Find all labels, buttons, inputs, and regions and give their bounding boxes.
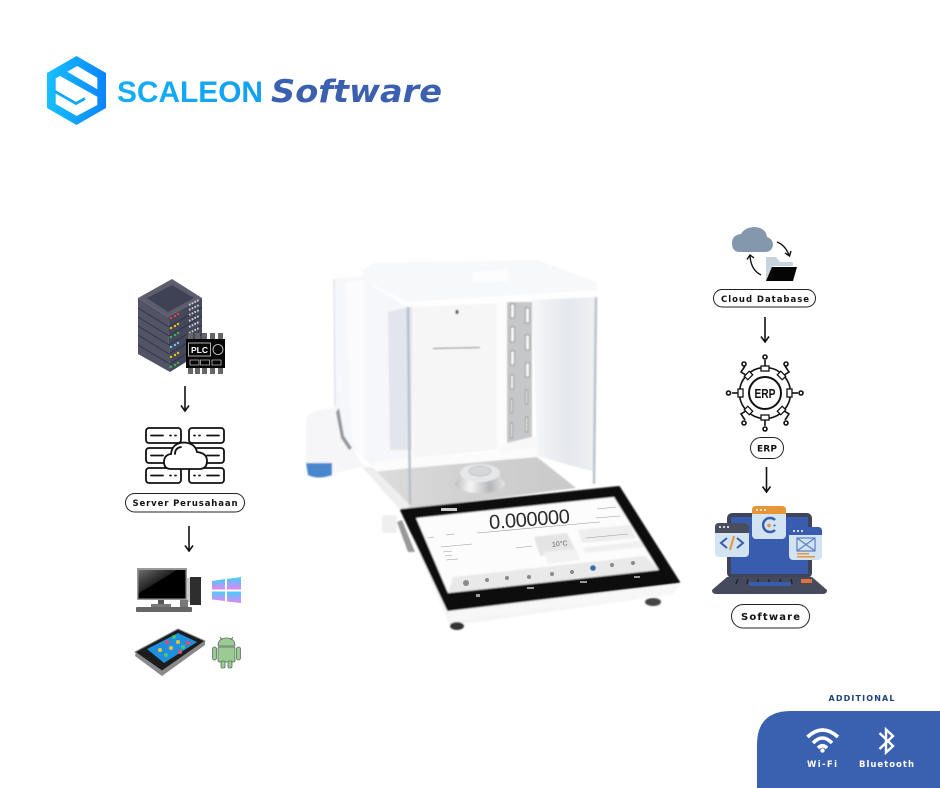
icon: Android logo [212, 637, 240, 668]
icon: ERP gear [726, 355, 803, 431]
label: Bluetooth: Bluetooth [859, 760, 914, 770]
icon: laptop with software windows [712, 506, 827, 594]
heading: Additional: ADDITIONAL [828, 694, 894, 703]
panel: additional connectivity [757, 711, 940, 788]
weighing pan [455, 464, 505, 493]
label: Software [732, 604, 810, 628]
arrow: company server to devices [185, 526, 193, 551]
icon: cloud and folder sync [732, 227, 797, 281]
steel floor [372, 457, 576, 510]
icon: server rack [138, 279, 202, 372]
display screen [416, 497, 659, 593]
base support bump [382, 515, 397, 533]
icon: PLC module: PLC [191, 345, 208, 355]
screen reading: 0.000000 [488, 506, 571, 534]
icon: cloud server [146, 428, 224, 483]
icon: smartphone [135, 629, 205, 676]
label: Server Perusahaan [126, 494, 244, 512]
side sensor and blue foot [306, 407, 364, 478]
arrow: cloud database to ERP [761, 317, 769, 342]
label: Cloud Database [714, 290, 816, 307]
icon: ERP gear: ERP [754, 386, 776, 401]
feet [450, 622, 464, 630]
label: ERP: ERP [757, 444, 777, 454]
label: ERP [750, 438, 784, 458]
screen toolbar icons [463, 561, 635, 586]
label: Cloud Database: Cloud Database [721, 295, 809, 305]
logo: Scaleon Software [47, 56, 442, 125]
glass front edges [408, 307, 410, 505]
steel slotted plate [497, 302, 538, 453]
logo wordmark Software: Software [271, 74, 442, 110]
label: Wi-Fi: Wi-Fi [807, 760, 837, 770]
C window [752, 506, 786, 539]
left side glass wing [334, 276, 412, 466]
screen details [428, 507, 628, 560]
icon: Windows logo [212, 577, 241, 603]
icon: PLC module [186, 333, 225, 374]
code window [715, 523, 749, 557]
lid of draft shield [362, 260, 597, 307]
base frame rail [362, 467, 410, 513]
logo wordmark SCALEON: SCALEON [117, 76, 263, 109]
display bezel keys [441, 508, 640, 597]
label: Server Perusahaan: Server Perusahaan [132, 499, 238, 509]
mail window [789, 527, 822, 560]
screen temperature: 10°C [552, 539, 568, 549]
label: Software: Software [741, 612, 800, 623]
arrow: server to company server [181, 386, 189, 411]
icon: bluetooth [880, 730, 893, 752]
display bezel [401, 487, 679, 610]
icon: wifi [808, 730, 838, 752]
icon: desktop computer [136, 568, 201, 612]
back panel [412, 303, 497, 458]
icon: hexagon S logo [47, 56, 106, 125]
server status lights [170, 313, 179, 368]
arrow: ERP to software [762, 467, 770, 492]
rear and right glass [532, 297, 597, 472]
product: analytical balance [306, 260, 680, 630]
